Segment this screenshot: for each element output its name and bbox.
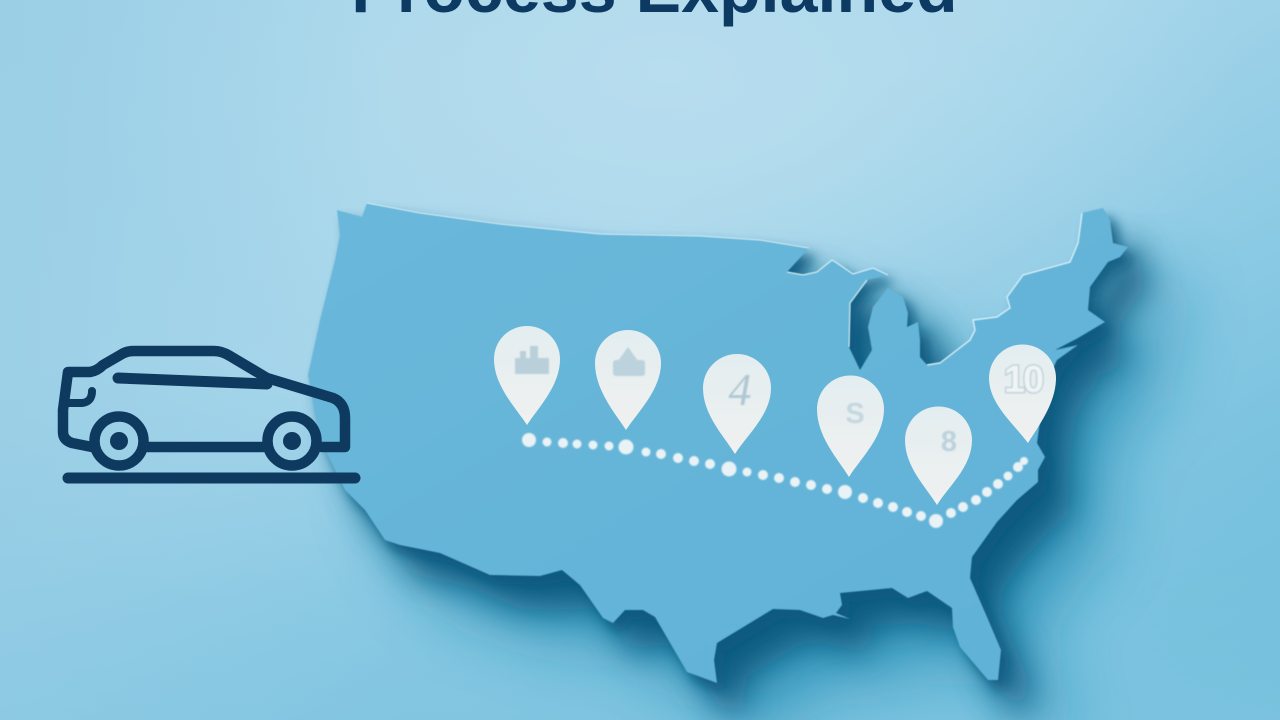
pin 6 bbox=[989, 344, 1056, 443]
pin 1 bbox=[494, 326, 560, 425]
pin 5 bbox=[905, 406, 972, 505]
pin 3 bbox=[703, 354, 771, 454]
pin 4: S bbox=[845, 398, 865, 430]
pin 5: 8 bbox=[941, 426, 957, 458]
map of the United States bbox=[308, 203, 1190, 720]
factory glyph bbox=[515, 346, 549, 374]
rear wheel bbox=[94, 416, 144, 466]
pin 6: 10 bbox=[1004, 359, 1043, 401]
dotted route bbox=[522, 433, 1028, 528]
pin 4 bbox=[817, 376, 884, 477]
pin 2 bbox=[595, 330, 661, 430]
car icon bbox=[63, 351, 355, 478]
vehicle glyph bbox=[613, 347, 645, 376]
front wheel bbox=[268, 416, 316, 466]
road line bbox=[68, 472, 355, 484]
pin 3: 4 bbox=[728, 364, 752, 415]
